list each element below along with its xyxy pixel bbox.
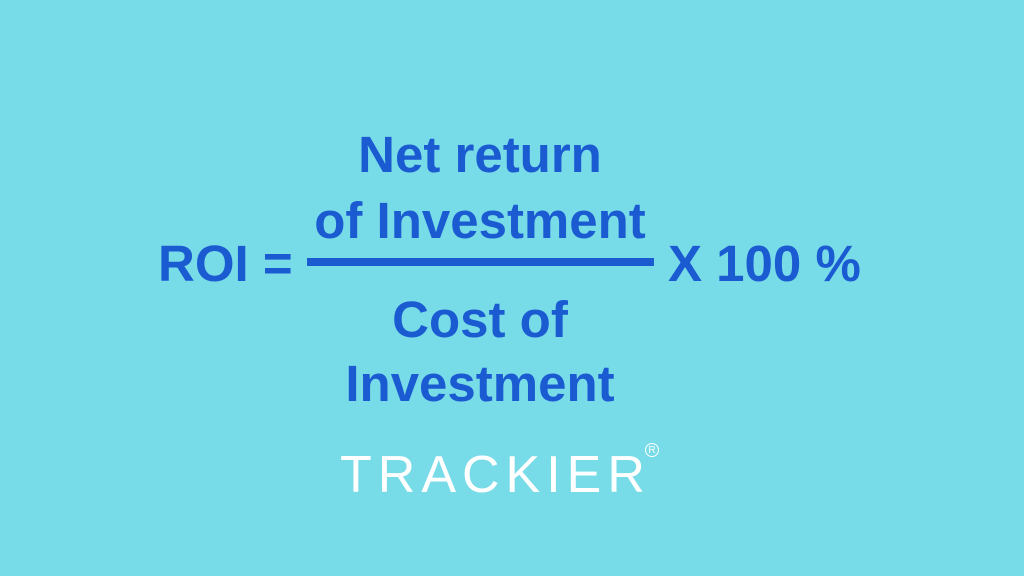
denominator: Investment — [345, 355, 615, 412]
denominator: Cost of — [392, 291, 568, 348]
logo: TRACKIER: R — [648, 445, 656, 456]
fraction bar — [307, 258, 654, 266]
logo: TRACKIER: TRACKIER — [340, 446, 651, 504]
numerator — [314, 126, 646, 249]
denominator — [345, 291, 615, 412]
multiply 100 percent: X 100 % — [668, 235, 861, 292]
numerator: of Investment — [314, 192, 646, 249]
ROI equals: ROI = — [158, 235, 293, 292]
numerator: Net return — [358, 126, 602, 183]
